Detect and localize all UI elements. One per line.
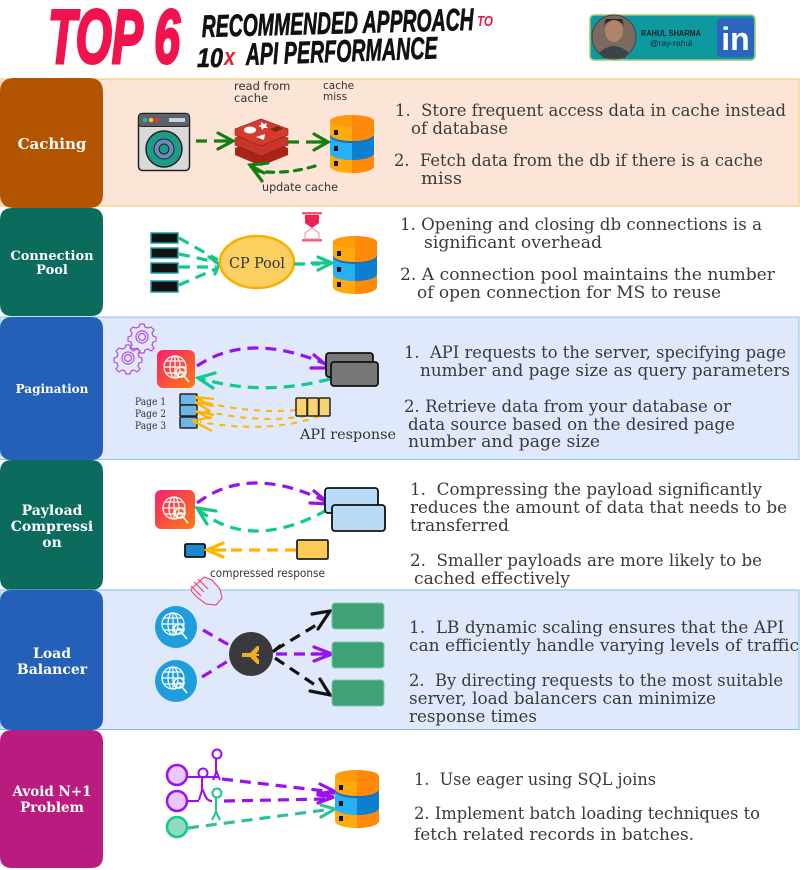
label: avoid N+1 problem: Problem [20,800,84,816]
heading: recommended approach to 10x API performance: 10 [197,43,223,73]
panel: payload compression [0,460,787,590]
text: caching points: miss [421,169,462,189]
text: payload points: transferred [410,516,509,536]
text: payload points: 1. Compressing the payload significantly [410,480,762,500]
text: N+1 points [414,770,760,845]
label: connection pool: Pool [36,263,68,278]
text: payload points [410,480,787,589]
icon: search tile [155,490,195,529]
icon: gears [114,324,156,374]
icon: database [333,236,377,294]
arrows: services to pool [179,238,219,285]
label: pagination: Pagination [16,382,89,396]
original block [297,540,328,559]
text: payload points: reduces the amount of data that needs to be [410,498,787,518]
text: load balancer points [409,618,799,727]
arrow: compressed response [207,543,296,557]
label: compressed response: compressed response [210,566,325,580]
text: connection pool points [400,215,776,303]
server boxes [332,603,384,706]
label: avoid N+1 problem [0,730,103,868]
heading: recommended approach to 10x API performance: TO [477,13,493,30]
label: load balancer: Load [33,646,71,662]
label: connection pool [0,208,103,316]
text: caching points: 1. Store frequent access data in cache instead [395,101,786,121]
arrow: request [197,483,330,504]
icon: search tile [157,350,195,388]
icon: services [151,233,178,292]
panel: pagination [0,317,799,460]
text: caching points [394,101,786,189]
heading: recommended approach to 10x API performance [197,2,493,73]
response blocks [296,398,330,416]
arrows: pages [193,397,320,431]
icon: hand [191,577,222,605]
label: connection pool: Connection [10,249,94,264]
panel: avoid N+1 problem [0,730,760,868]
panel: caching [0,78,799,208]
arrow: update cache [250,163,315,181]
icon: client 1 [155,606,197,648]
icon: hourglass [302,212,322,242]
text: N+1 points: fetch related records in batches. [414,825,694,845]
text: pagination points: 2. Retrieve data from your database or [404,397,732,417]
label: API response: API response [299,427,396,443]
payload cards [325,488,385,531]
pool ellipse: CP Pool [229,254,285,272]
label: read from cache: read from [234,79,290,93]
label: load balancer: Balancer [17,662,88,678]
text: pagination points: 1. API requests to the server, specifying page [404,343,786,363]
arrows: queries to database [188,779,335,828]
label: cache miss: cache [323,80,354,92]
icon: client 2 [155,660,197,702]
arrow: app to redis [196,133,233,149]
text: payload points: cached effectively [414,569,570,589]
people: purple [187,750,222,801]
text: pagination points [404,343,790,452]
label: payload compression: Compressi [11,519,93,535]
text: connection pool points: significant overhead [424,233,602,253]
text: connection pool points: 2. A connection pool maintains the number [400,265,776,285]
page labels: Page 2 [135,409,166,420]
heading: recommended approach to 10x API performance: x [222,44,236,71]
text: pagination points: number and page size as query parameters [420,361,790,381]
icon: LinkedIn: in [721,21,750,57]
text: load balancer points: response times [409,707,537,727]
text: load balancer points: 1. LB dynamic scaling ensures that the API [409,618,784,638]
text: load balancer points: can efficiently handle varying levels of traffic [409,636,799,656]
label: update cache: update cache [262,180,338,194]
icon: database [330,115,374,173]
page labels [135,397,166,432]
text: load balancer points: server, load balancers can minimize [409,689,716,709]
icon: app server [138,114,190,170]
icon: database [335,770,379,828]
label: avoid N+1 problem: Avoid N+1 [11,784,92,800]
panel: load balancer [0,577,799,730]
text: payload points: 2. Smaller payloads are more likely to be [410,551,762,571]
text: N+1 points: 2. Implement batch loading techniques to [414,804,760,824]
server cards [326,353,378,386]
text: pagination points: data source based on the desired page [408,415,735,435]
panel: connection pool [0,208,776,316]
pages stack [180,394,197,428]
icon: redis [235,119,288,166]
text: N+1 points: 1. Use eager using SQL joins [414,770,656,790]
author badge: RAHUL SHARMA [641,28,701,38]
text: load balancer points: 2. By directing requests to the most suitable [409,671,783,691]
label: cache miss: miss [323,91,347,103]
label: payload compression [0,460,103,590]
label: pagination [0,317,103,460]
pool ellipse [220,236,294,288]
label: payload compression: on [42,535,62,551]
label: caching [0,78,103,208]
text: connection pool points: 1. Opening and closing db connections is a [400,215,762,235]
text: connection pool points: of open connection for MS to reuse [417,283,721,303]
arrows: balancer to servers [274,611,332,695]
text: caching points: 2. Fetch data from the db if there is a cache [394,151,763,171]
compressed block [185,544,205,557]
label: read from cache: cache [234,91,268,105]
arrow: redis to database [288,134,328,150]
arrow: response [198,373,330,388]
author badge [590,15,755,60]
text: caching points: of database [411,119,508,139]
label: payload compression: Payload [22,503,83,519]
person: green [212,788,222,820]
arrow: request [197,348,330,368]
icon: load balancer hub [229,632,273,676]
text: pagination points: number and page size [408,432,600,452]
arrows: clients to balancer [202,630,241,677]
page labels: Page 3 [135,421,166,432]
label: caching: Caching [18,135,87,153]
label: load balancer [0,590,103,730]
query nodes [167,765,187,837]
arrow: response [197,508,327,531]
author badge: @ray-rahul [650,38,692,48]
arrow: pool to database [294,257,332,270]
page labels: Page 1 [135,397,166,408]
heading: recommended approach to 10x API performance: API PERFORMANCE [244,30,439,72]
author photo [592,15,636,59]
